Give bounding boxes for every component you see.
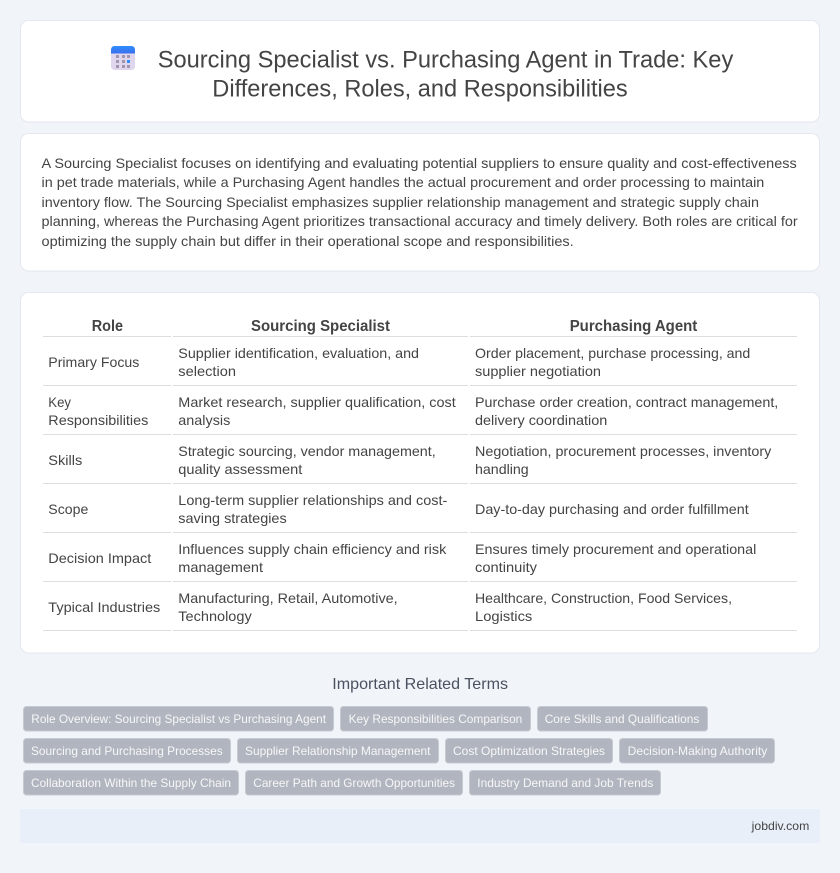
row: key responsibilities: delivery coordination	[475, 412, 607, 428]
footer bar	[20, 809, 820, 843]
row: decision impact: Decision Impact	[48, 550, 151, 566]
panel: introduction	[20, 134, 820, 271]
title: Sourcing Specialist vs. Purchasing Agent in Trade: Key	[158, 46, 733, 74]
tag: Decision-Making Authority	[628, 744, 767, 758]
tag: Career Path and Growth Opportunities	[253, 776, 455, 790]
tag	[538, 706, 708, 731]
row: scope: Long-term supplier relationships and cost-	[178, 492, 448, 508]
row: decision impact: Ensures timely procurement and operational	[475, 541, 756, 557]
tag: Key Responsibilities Comparison	[349, 712, 522, 726]
footer brand text: jobdiv.com	[751, 819, 809, 833]
intro text block: optimizing the supply chain but differ in their operational scope and responsibilities.	[42, 233, 574, 249]
title	[158, 46, 733, 102]
row: typical industries: Logistics	[475, 608, 532, 624]
tag: Core Skills and Qualifications	[545, 712, 699, 726]
row: decision impact: continuity	[475, 559, 537, 575]
tag	[340, 706, 530, 731]
tag	[24, 706, 334, 731]
tag	[246, 770, 462, 795]
row: scope: Day-to-day purchasing and order fulfillment	[475, 501, 749, 517]
row: skills: quality assessment	[178, 461, 302, 477]
row: typical industries: Healthcare, Construction, Food Services,	[475, 590, 732, 606]
tag	[446, 738, 612, 763]
row: primary focus: Supplier identification, evaluation, and	[178, 345, 419, 361]
tag: Role Overview: Sourcing Specialist vs Purchasing Agent	[31, 712, 327, 726]
row: scope: Scope	[48, 501, 89, 517]
row: key responsibilities	[43, 394, 797, 435]
row: primary focus: Order placement, purchase processing, and	[475, 345, 750, 361]
tag: Sourcing and Purchasing Processes	[31, 744, 223, 758]
row: key responsibilities: Responsibilities	[48, 412, 148, 428]
row: decision impact	[43, 541, 797, 582]
row: key responsibilities: Purchase order creation, contract management,	[475, 394, 778, 410]
intro text block: A Sourcing Specialist focuses on identifying and evaluating potential suppliers to ensure quality and cost-effectiveness	[42, 155, 797, 171]
title: Differences, Roles, and Responsibilities	[212, 76, 628, 102]
tags: related terms	[24, 706, 774, 795]
header panel	[20, 20, 820, 122]
row: key responsibilities: analysis	[178, 412, 230, 428]
row: scope: saving strategies	[178, 510, 287, 526]
icon: calendar	[111, 46, 135, 70]
heading: important related terms: Important Related Terms	[332, 676, 508, 693]
tag	[238, 738, 438, 763]
row: scope	[43, 492, 797, 533]
intro text block: inventory flow. The Sourcing Specialist emphasizes supplier relationship management and strategic supply chain	[42, 194, 759, 210]
intro text block: in pet trade materials, while a Purchasing Agent handles the actual procurement and order processing to maintain	[42, 174, 764, 190]
tag: Collaboration Within the Supply Chain	[31, 776, 231, 790]
tag: Cost Optimization Strategies	[453, 744, 605, 758]
panel: comparison table	[20, 292, 820, 653]
row: decision impact: management	[178, 559, 263, 575]
row: typical industries: Typical Industries	[48, 599, 160, 615]
table header row: Role	[92, 318, 123, 335]
table header row: Sourcing Specialist	[251, 318, 391, 335]
tag	[24, 770, 238, 795]
row: skills: handling	[475, 461, 529, 477]
intro text block	[42, 155, 798, 249]
intro text block: planning, whereas the Purchasing Agent prioritizes transactional accuracy and timely delivery. Both roles are critical for	[42, 213, 798, 229]
table header row: Purchasing Agent	[570, 318, 698, 335]
row: primary focus: Primary Focus	[48, 354, 139, 370]
row: typical industries: Technology	[178, 608, 252, 624]
tag	[24, 738, 230, 763]
table header row	[43, 318, 797, 337]
row: decision impact: Influences supply chain efficiency and risk	[178, 541, 447, 557]
row: skills: Skills	[48, 452, 82, 468]
row: primary focus	[43, 345, 797, 386]
row: key responsibilities: Key	[48, 394, 71, 410]
row: skills: Strategic sourcing, vendor management,	[178, 443, 436, 459]
row: typical industries: Manufacturing, Retail, Automotive,	[178, 590, 398, 606]
tag	[620, 738, 774, 763]
row: skills	[43, 443, 797, 484]
row: typical industries	[43, 590, 797, 631]
row: skills: Negotiation, procurement processes, inventory	[475, 443, 771, 459]
tag: Industry Demand and Job Trends	[477, 776, 653, 790]
tag	[470, 770, 660, 795]
row: primary focus: selection	[178, 363, 236, 379]
row: key responsibilities: Market research, supplier qualification, cost	[178, 394, 456, 410]
tag: Supplier Relationship Management	[245, 744, 431, 758]
row: primary focus: supplier negotiation	[475, 363, 601, 379]
